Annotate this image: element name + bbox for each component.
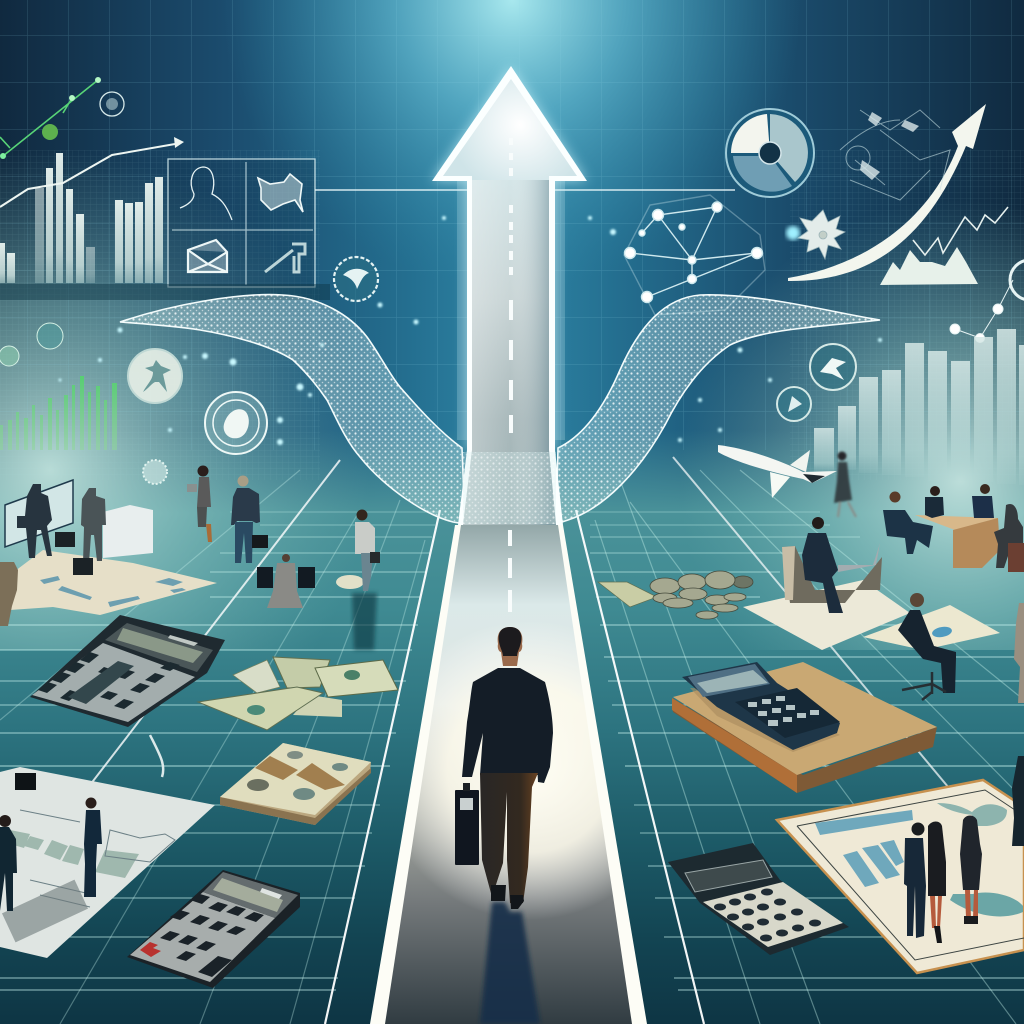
horizon band	[0, 284, 330, 300]
document board	[5, 480, 73, 547]
hair	[499, 627, 521, 656]
paper stack	[103, 505, 153, 558]
network graph	[624, 195, 765, 315]
left finance chart group	[0, 77, 735, 484]
woman 2	[960, 816, 982, 924]
perspective floor grid	[0, 457, 1024, 1024]
right bottom calculator	[668, 843, 849, 955]
glow spot	[786, 226, 800, 240]
wave ribbon: right	[556, 295, 880, 524]
left bottom calculator	[127, 870, 300, 988]
standing man left	[0, 815, 17, 911]
shoes	[491, 885, 524, 909]
figure 5 sitting	[257, 554, 315, 608]
trend line: green arrow	[0, 77, 101, 159]
bar chart: green bars	[0, 376, 117, 450]
arrow shaft	[463, 170, 556, 525]
left cash fan	[198, 657, 398, 730]
walker shadow	[480, 902, 540, 1024]
report text block	[2, 880, 88, 942]
main walking businessman	[455, 627, 553, 909]
right seated man in office chair	[898, 593, 1024, 703]
dots crossing road	[463, 452, 556, 524]
icon: swirl badge	[334, 257, 378, 301]
large papers on floor	[7, 550, 217, 615]
left calculator top	[30, 615, 225, 727]
figure 3	[187, 466, 212, 542]
wave ribbon: left	[120, 295, 465, 524]
panel: outlined icon grid	[168, 159, 735, 287]
paper clip	[150, 735, 163, 777]
blurred walking woman	[834, 452, 856, 517]
jacket	[462, 668, 553, 783]
icon: flower	[798, 210, 845, 259]
standing man	[84, 798, 102, 897]
shaft shading	[463, 176, 556, 525]
network: right edge	[950, 260, 1024, 342]
arrow glow	[432, 66, 587, 450]
report chart	[815, 810, 913, 887]
right plane and figure	[718, 445, 856, 517]
man right edge	[1012, 756, 1024, 846]
central road and arrow	[370, 66, 647, 1024]
left lower report and figures	[0, 735, 215, 958]
right book and calculator	[672, 662, 937, 793]
arrow head fill	[443, 79, 577, 180]
bar chart: left white bars	[0, 153, 163, 283]
report chart	[10, 830, 139, 878]
bar chart: small spike chart	[880, 247, 978, 285]
road lower	[370, 525, 647, 1024]
right coins and cash	[598, 571, 753, 619]
figure 2	[81, 488, 106, 563]
person at right edge	[1014, 603, 1024, 703]
road dashes	[508, 138, 513, 612]
figure 6	[336, 510, 380, 650]
arrow outline	[432, 66, 587, 525]
icon: round bubbles	[0, 323, 267, 484]
figure 1	[17, 484, 52, 558]
right seated man and papers	[743, 517, 1000, 650]
briefcase	[455, 783, 479, 865]
left small figures	[0, 466, 380, 650]
trend line: white arrow	[0, 137, 184, 207]
head	[498, 627, 522, 666]
right meeting table	[883, 484, 1024, 572]
man	[904, 822, 926, 938]
woman 1	[928, 822, 946, 943]
side strips	[457, 181, 565, 440]
cash stacks	[220, 743, 371, 825]
report line sketch	[20, 810, 175, 907]
scattered sparkles	[58, 216, 882, 445]
icon: small gauge	[100, 92, 124, 116]
icon: right bubbles	[777, 344, 856, 421]
icon: pie dial	[726, 109, 814, 197]
plane	[718, 445, 837, 498]
right finance chart group	[624, 104, 1024, 485]
bar chart: right white bars	[814, 329, 1024, 485]
figure 4	[231, 476, 268, 563]
coins at left edge	[0, 562, 18, 626]
circuit sketch	[840, 110, 950, 200]
black box	[15, 773, 36, 790]
right report and three figures	[777, 756, 1024, 973]
spike line	[913, 207, 1008, 255]
trousers	[480, 773, 538, 903]
paper marks	[40, 576, 186, 607]
suitcases	[55, 532, 93, 575]
big rising arrow	[788, 104, 986, 281]
